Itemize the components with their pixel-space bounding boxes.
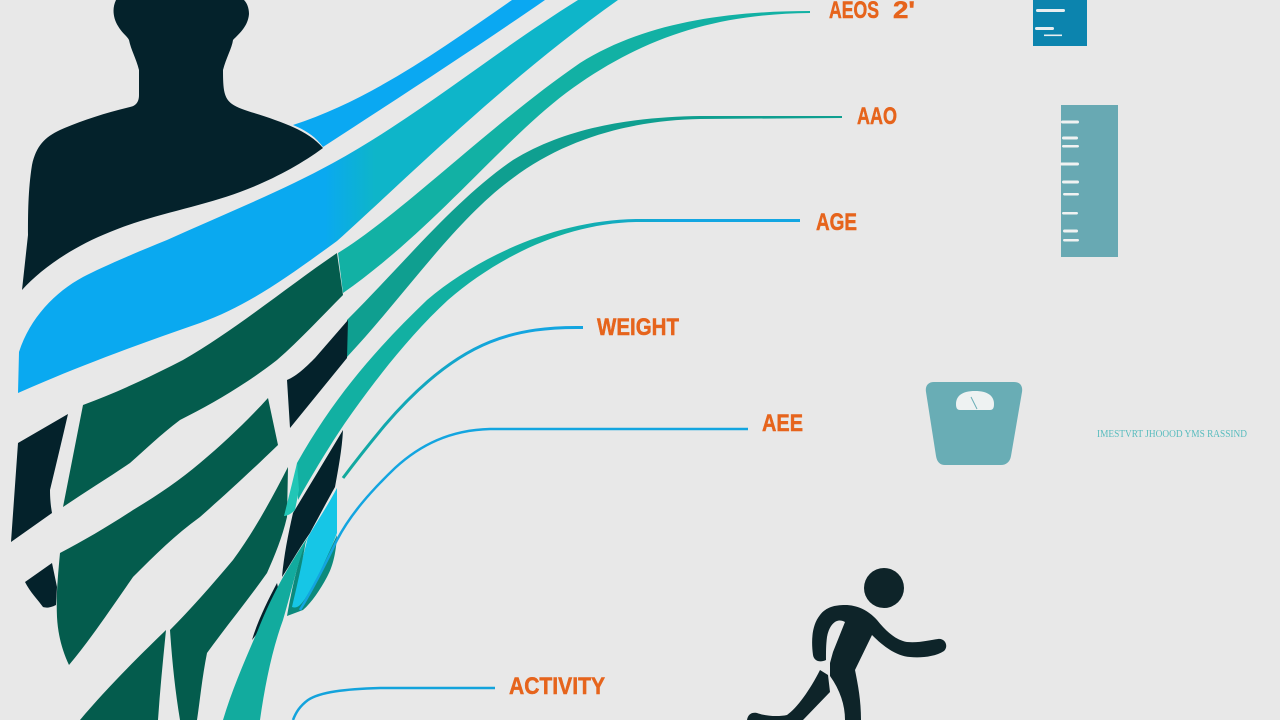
label: AEE: AEE (762, 410, 803, 437)
dark sliver (282, 430, 343, 577)
ribbon 3: teal (338, 11, 810, 293)
label: AAO: AAO (857, 103, 897, 130)
green panel middle (57, 398, 278, 665)
label: ACTIVITY: ACTIVITY (509, 673, 605, 700)
cyan facet (291, 488, 337, 611)
icon: running figure (747, 568, 946, 720)
dark body segment right (287, 320, 348, 428)
runner head (864, 568, 904, 608)
dark sliver lower (252, 583, 279, 640)
ribbon 5: teal to blue line (297, 219, 800, 500)
caption: small teal text: IMESTVRT JHOOOD YMS RASSIND (1097, 429, 1247, 440)
figure: silhouette and ribbons (11, 0, 842, 720)
light cyan facet (284, 463, 299, 516)
icon: weighing scale (926, 382, 1022, 465)
green panel lower left leg (80, 630, 166, 720)
dark arm segment (11, 414, 68, 542)
green facet lower (287, 535, 337, 616)
dark hand (25, 563, 57, 608)
silhouette head and torso (22, 0, 323, 290)
ribbon 2: blue to cyan (18, 0, 618, 393)
activity line (293, 688, 495, 720)
label: WEIGHT: WEIGHT (597, 314, 679, 341)
green panel upper (63, 253, 343, 507)
label: AGE: AGE (816, 209, 857, 236)
ribbon lower band (223, 537, 308, 720)
ribbon 1: blue (293, 0, 545, 147)
ribbon 4: deep teal (347, 116, 842, 357)
runner back leg (747, 670, 830, 720)
runner body, arms and front leg (812, 605, 946, 720)
icon: blue document (1033, 0, 1087, 46)
green panel lower right leg (170, 467, 288, 720)
weight line (343, 327, 583, 478)
age line (300, 429, 748, 610)
icon: height ruler (1060, 105, 1118, 257)
